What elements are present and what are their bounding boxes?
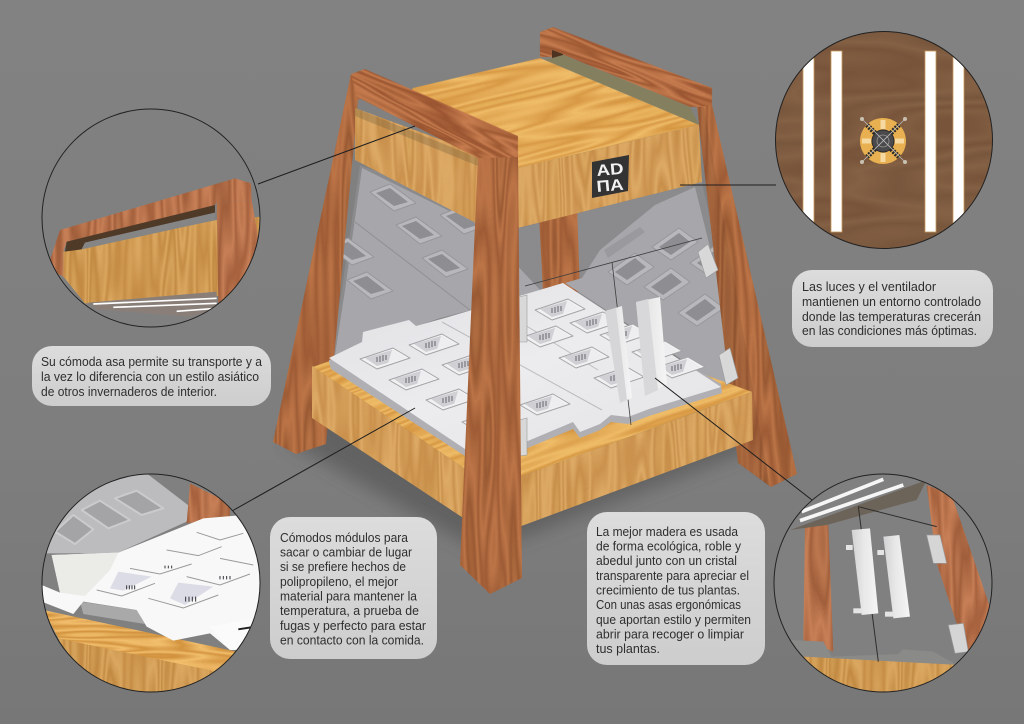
door handle left: [605, 306, 632, 403]
back beam: [513, 0, 739, 165]
text block: wood and glass: tus plantas.: [596, 642, 660, 656]
text block: lights and fan: mantienen un entorno controlado: [802, 295, 981, 309]
base top: [253, 159, 812, 628]
text block: lights and fan: en las condiciones más óptimas.: [802, 324, 977, 338]
wells: [360, 299, 705, 432]
text block: wood and glass: transparente para apreciar el: [596, 569, 749, 583]
base left face: [312, 366, 492, 537]
text block: handle: la vez lo diferencia con un estilo asiático: [41, 370, 259, 384]
circle: tray module detail: [40, 472, 264, 700]
band in circle: [63, 217, 263, 303]
hinges: [519, 244, 738, 456]
text block: wood and glass: abrir para recoger o limpiar: [596, 628, 744, 642]
glass panel tint: [330, 165, 745, 380]
text block: wood and glass: abedul junto con un cristal: [596, 554, 737, 568]
text block: modules: Cómodos módulos para: [280, 531, 408, 545]
text block: handle: [32, 346, 271, 406]
circle: handle detail: [40, 105, 265, 330]
door handle right: [636, 297, 667, 396]
text block: modules: [270, 517, 437, 659]
tray top: [329, 283, 721, 449]
text block: modules: fugas y perfecto para estar: [280, 619, 426, 633]
front beam: [318, 7, 551, 220]
text block: wood and glass: que aportan estilo y permiten: [596, 613, 751, 627]
text block: modules: polipropileno, el mejor: [280, 575, 398, 589]
text block: wood and glass: de forma ecológica, roble y: [596, 540, 742, 554]
top band top surface: [376, 0, 723, 234]
logo: AD: [596, 161, 624, 180]
text block: modules: en contacto con la comida.: [280, 634, 424, 648]
center front leg: [460, 155, 522, 594]
text block: modules: si se prefiere hechos de: [280, 560, 406, 574]
back leg: [539, 205, 580, 292]
text block: modules: sacar o cambiar de lugar: [280, 546, 412, 560]
logo: [592, 155, 629, 198]
tray edge: [329, 290, 722, 456]
product: greenhouse: [253, 0, 812, 628]
fan: [860, 117, 907, 164]
base right face: [492, 392, 753, 537]
text block: handle: de otros invernaderos de interior.: [41, 385, 217, 399]
logo: ΠA: [596, 177, 625, 196]
text block: lights and fan: [792, 270, 993, 347]
ground shadow: [285, 405, 790, 550]
circle: lights and fan: [774, 30, 994, 250]
circle: door handles detail: [772, 472, 996, 700]
text block: wood and glass: Con unas asas ergonómicas: [596, 598, 741, 612]
text block: handle: Su cómoda asa permite su transporte y a: [41, 355, 262, 369]
top band right face: [518, 125, 702, 228]
text block: modules: material para mantener la: [280, 590, 417, 604]
text block: wood and glass: La mejor madera es usada: [596, 525, 738, 539]
module divider: [442, 322, 602, 410]
reflected tray left: [328, 168, 542, 355]
left leg: [273, 74, 367, 454]
text block: wood and glass: crecimiento de tus plantas.: [596, 584, 740, 598]
reflected tray right: [565, 187, 738, 388]
text block: lights and fan: donde las temperaturas crecerán: [802, 310, 981, 324]
top band left face: [355, 108, 518, 228]
glass door lines: [525, 238, 702, 425]
tray: [329, 283, 722, 456]
text block: lights and fan: Las luces y el ventilador: [802, 280, 936, 294]
text block: wood and glass: [587, 512, 765, 665]
text block: modules: temperatura, a prueba de: [280, 604, 419, 618]
light strips: [802, 50, 964, 232]
leader lines: [232, 126, 812, 511]
right leg: [697, 105, 797, 487]
